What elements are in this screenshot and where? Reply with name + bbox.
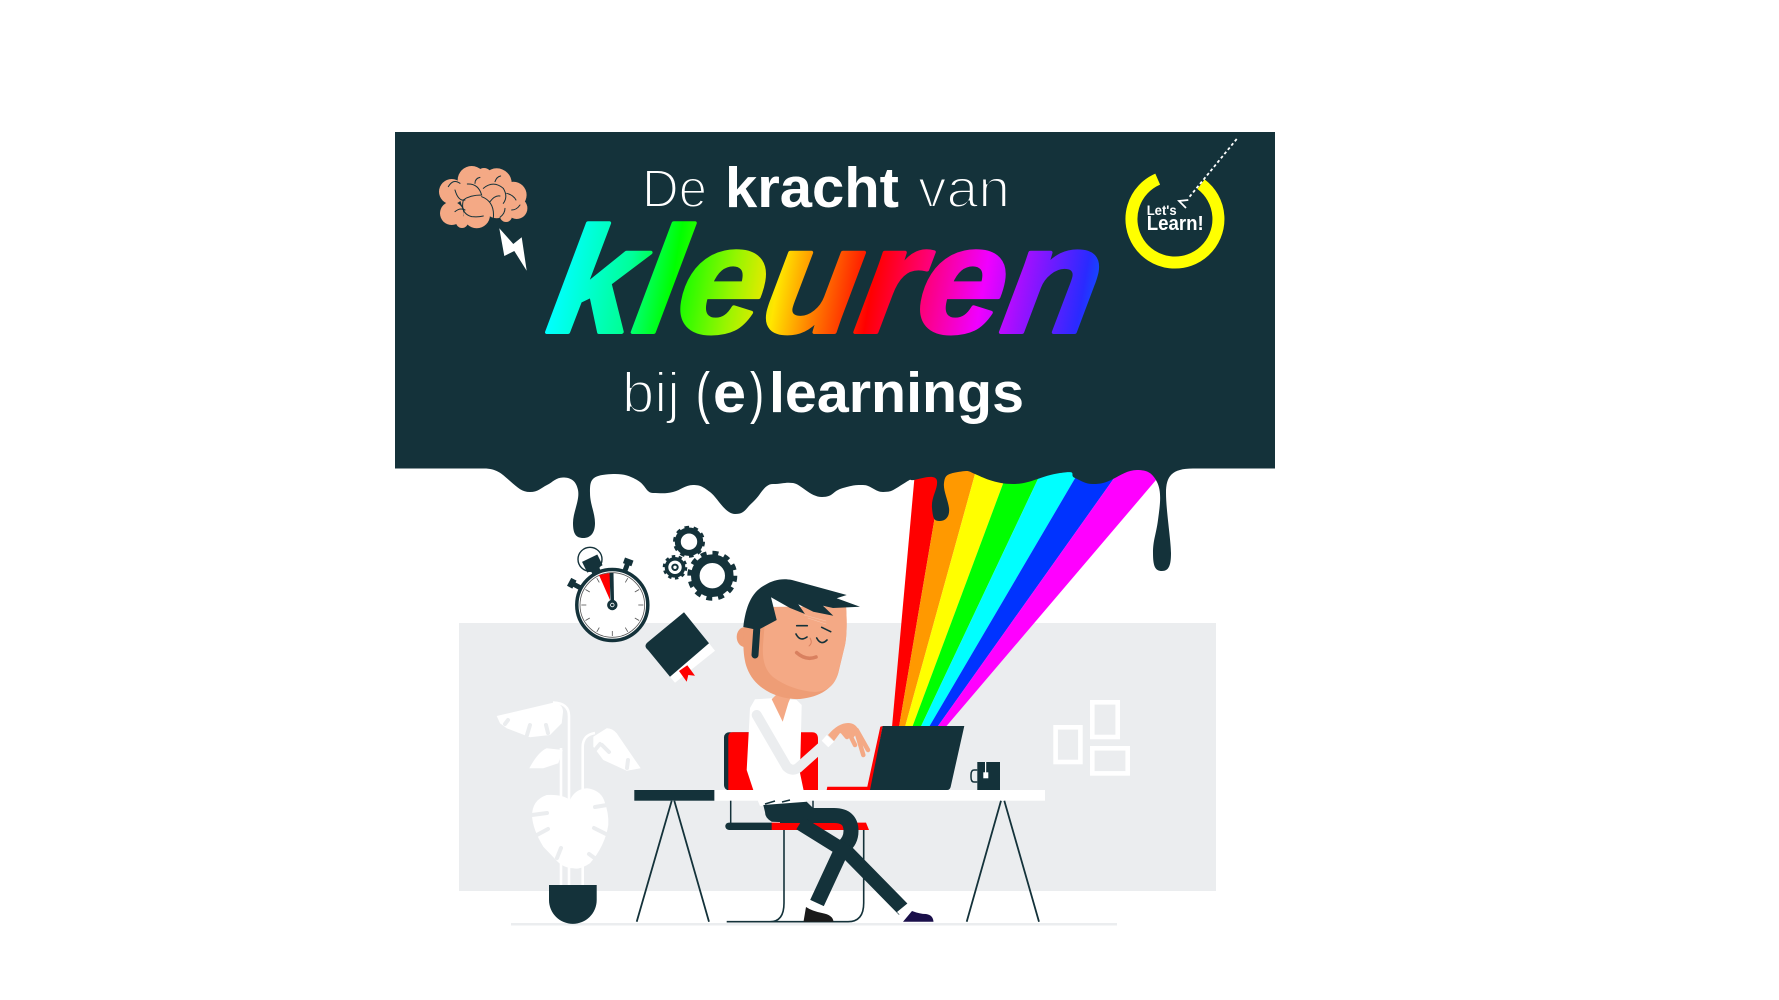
title line: De kracht van: De — [642, 159, 707, 219]
shirt — [747, 698, 806, 806]
coffee mug — [971, 762, 1000, 790]
trousers — [763, 802, 904, 910]
logo: Let's Learn — [1131, 139, 1237, 263]
floor line — [511, 923, 1117, 926]
title line: bij (e)learnings — [622, 361, 1024, 425]
title line: bij (e)learnings: ( — [696, 361, 710, 425]
title line: bij (e)learnings: ) — [750, 361, 764, 425]
title line: bij (e)learnings: e — [713, 361, 746, 425]
icon: brain — [439, 166, 527, 228]
laptop — [827, 726, 964, 790]
title line: bij (e)learnings: learnings — [769, 361, 1024, 425]
belt details — [765, 800, 790, 804]
hair — [743, 579, 860, 655]
grey wall panel — [459, 623, 1216, 891]
icon: lightning bolt — [499, 228, 527, 271]
title line: De kracht van — [642, 156, 1010, 220]
title line: De kracht van: kracht — [725, 156, 899, 220]
title line: bij (e)learnings: bij — [622, 361, 680, 425]
neck — [772, 695, 792, 722]
hand — [828, 723, 868, 755]
icon: stopwatch — [567, 547, 648, 640]
facial features — [796, 615, 831, 658]
socks and shoes — [804, 902, 934, 922]
plant — [497, 702, 641, 924]
logo: Let's Learn: Learn! — [1147, 213, 1204, 235]
chair — [724, 732, 869, 922]
plant pot — [549, 885, 597, 924]
face — [763, 606, 847, 692]
dark banner with paint drips — [395, 132, 1275, 571]
icon: gears — [664, 527, 735, 598]
character — [737, 579, 934, 922]
shirt cuff — [822, 735, 834, 747]
rainbow beam — [892, 465, 1169, 727]
icon: book — [646, 612, 715, 683]
logo: Let's Learn: Let's — [1147, 202, 1177, 218]
title line: De kracht van: van — [918, 159, 1010, 219]
head shadow and ear — [737, 606, 847, 699]
arm — [757, 715, 826, 770]
wall picture frames — [1056, 702, 1128, 773]
title word: kleuren in rainbow gradient: kleuren — [539, 197, 1116, 365]
desk — [634, 790, 1045, 922]
